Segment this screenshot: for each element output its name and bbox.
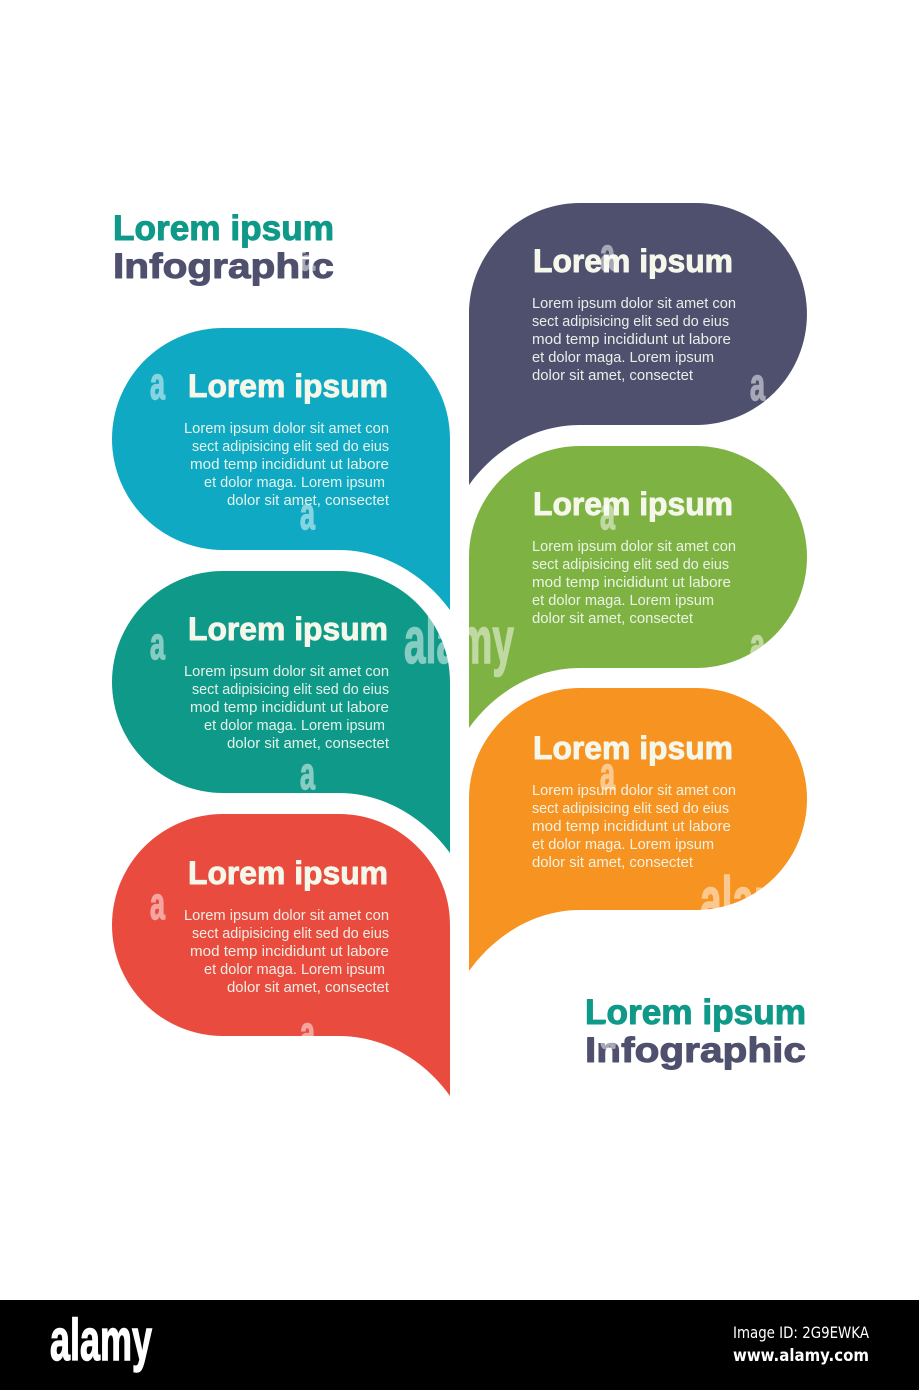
watermark: a: [150, 618, 166, 669]
watermark: a: [300, 229, 316, 280]
watermark: alamy: [404, 603, 514, 677]
panel: right bubble orange: Lorem ipsum: [533, 730, 733, 766]
panel: left bubble teal: dolor sit amet, consectet: [227, 736, 389, 752]
panel: left bubble red: sect adipisicing elit sed do eius: [192, 926, 389, 942]
title: bottom right: [585, 993, 806, 1070]
panel: left bubble blue: et dolor maga. Lorem ipsum: [204, 475, 385, 491]
watermark: a: [300, 748, 316, 799]
panel: left bubble red: mod temp incididunt ut labore: [190, 944, 389, 960]
panel: right bubble orange: [469, 688, 807, 971]
panel: left bubble teal: et dolor maga. Lorem ipsum: [204, 718, 385, 734]
panel: right bubble orange: Lorem ipsum dolor sit amet con: [532, 783, 736, 799]
panel: left bubble blue: Lorem ipsum dolor sit amet con: [184, 421, 389, 437]
website: www.alamy.com: [733, 1346, 869, 1366]
panel: right bubble green: Lorem ipsum: [533, 486, 733, 522]
panel: right bubble green: et dolor maga. Lorem ipsum: [532, 593, 714, 609]
watermark: a: [750, 619, 766, 670]
panel: right bubble green: mod temp incididunt ut labore: [532, 575, 731, 591]
panel: left bubble red: [112, 814, 450, 1096]
panel: left bubble blue: [112, 328, 450, 610]
panel: right bubble slate: mod temp incididunt ut labore: [532, 332, 731, 348]
panel: left bubble teal: [112, 571, 450, 853]
footer bar: [0, 1300, 919, 1390]
panel: left bubble teal: sect adipisicing elit sed do eius: [192, 682, 389, 698]
panel: right bubble slate: Lorem ipsum: [533, 243, 733, 279]
panel: right bubble orange: et dolor maga. Lorem ipsum: [532, 837, 714, 853]
panel: left bubble blue: mod temp incididunt ut labore: [190, 457, 389, 473]
watermark: a: [600, 1007, 616, 1058]
watermark: alamy: [700, 863, 810, 937]
panel: right bubble green: sect adipisicing elit sed do eius: [532, 557, 729, 573]
panel: left bubble blue: Lorem ipsum: [188, 368, 388, 404]
watermark: [150, 229, 810, 1058]
watermark: a: [600, 229, 616, 280]
title: top left: Lorem ipsum: [113, 209, 334, 248]
panel: left bubble red: Lorem ipsum dolor sit amet con: [184, 908, 389, 924]
panel: left bubble blue: sect adipisicing elit sed do eius: [192, 439, 389, 455]
panel: right bubble orange: sect adipisicing elit sed do eius: [532, 801, 729, 817]
panel: left bubble blue: dolor sit amet, consectet: [227, 493, 389, 509]
panel: left bubble red: dolor sit amet, consectet: [227, 980, 389, 996]
watermark: a: [300, 1007, 316, 1058]
panel: right bubble slate: dolor sit amet, consectet: [532, 368, 693, 384]
watermark: a: [600, 748, 616, 799]
panel: right bubble green: Lorem ipsum dolor sit amet con: [532, 539, 736, 555]
title: top left: Infographic: [113, 247, 334, 286]
watermark: a: [150, 878, 166, 929]
panel: left bubble teal: Lorem ipsum: [188, 611, 388, 647]
watermark: a: [600, 488, 616, 539]
panel: right bubble green: [469, 446, 807, 728]
panel: right bubble orange: dolor sit amet, consectet: [532, 855, 693, 871]
panel: right bubble slate: sect adipisicing elit sed do eius: [532, 314, 729, 330]
panel: right bubble slate: Lorem ipsum dolor sit amet con: [532, 296, 736, 312]
panel: left bubble red: Lorem ipsum: [188, 855, 388, 891]
title: bottom right: Lorem ipsum: [585, 993, 806, 1032]
panel: left bubble teal: Lorem ipsum dolor sit amet con: [184, 664, 389, 680]
title: top left: [113, 209, 334, 286]
panel: right bubble green: dolor sit amet, consectet: [532, 611, 693, 627]
watermark: a: [150, 358, 166, 409]
watermark: a: [300, 488, 316, 539]
watermark: a: [750, 359, 766, 410]
panel: right bubble slate: et dolor maga. Lorem ipsum: [532, 350, 714, 366]
title: bottom right: Infographic: [585, 1031, 806, 1070]
image id: Image ID: 2G9EWKA: [733, 1323, 869, 1342]
panel: right bubble slate: [469, 203, 807, 485]
panel: left bubble teal: mod temp incididunt ut labore: [190, 700, 389, 716]
panel: left bubble red: et dolor maga. Lorem ipsum: [204, 962, 385, 978]
panel: right bubble orange: mod temp incididunt ut labore: [532, 819, 731, 835]
footer logo: alamy: [50, 1308, 152, 1373]
